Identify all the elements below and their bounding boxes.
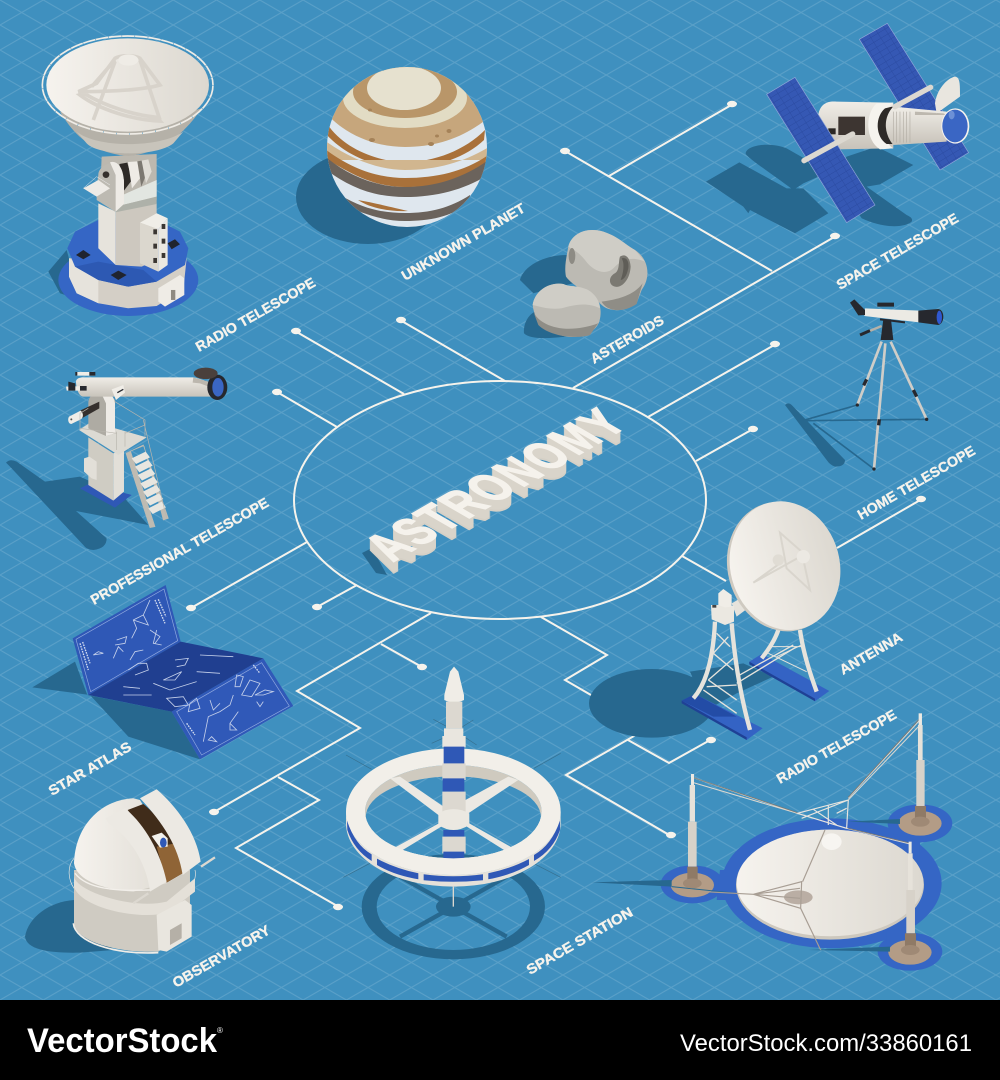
icon: home telescope <box>785 299 943 471</box>
label: space station: SPACE STATION <box>524 904 635 978</box>
label: unknown planet: UNKNOWN PLANET <box>398 200 528 284</box>
label: radio telescope: RADIO TELESCOPE <box>193 274 318 355</box>
icon: professional telescope <box>6 368 227 550</box>
icon: radio telescope dish <box>42 36 213 316</box>
footer url: VectorStock.com/33860161 <box>680 1030 972 1057</box>
icon: antenna <box>589 489 855 740</box>
title text shadow <box>362 548 387 575</box>
icon: star atlas <box>32 585 293 759</box>
icon: unknown planet <box>296 67 487 244</box>
icon: asteroids <box>520 230 647 338</box>
label: asteroids: ASTEROIDS <box>588 312 667 367</box>
label: home telescope: HOME TELESCOPE <box>854 442 978 523</box>
icon: radio telescope in ground <box>592 713 952 971</box>
label: antenna: ANTENNA <box>836 629 905 678</box>
icon: space telescope <box>706 23 969 233</box>
label: star atlas: STAR ATLAS <box>46 738 134 799</box>
label: observatory: OBSERVATORY <box>170 921 273 991</box>
label: professional telescope: PROFESSIONAL TELESCOPE <box>88 494 271 608</box>
flowchart connectors <box>186 101 926 910</box>
footer bar <box>0 1000 1000 1080</box>
icon: space station <box>343 667 561 959</box>
footer brand: VectorStock <box>27 1022 217 1060</box>
title: astronomy: ASTRONOMY <box>352 401 643 569</box>
footer registered mark: ® <box>217 1026 223 1035</box>
icon: observatory <box>25 789 215 953</box>
label: radio telescope 2: RADIO TELESCOPE <box>774 706 899 787</box>
label: space telescope: SPACE TELESCOPE <box>834 210 961 293</box>
